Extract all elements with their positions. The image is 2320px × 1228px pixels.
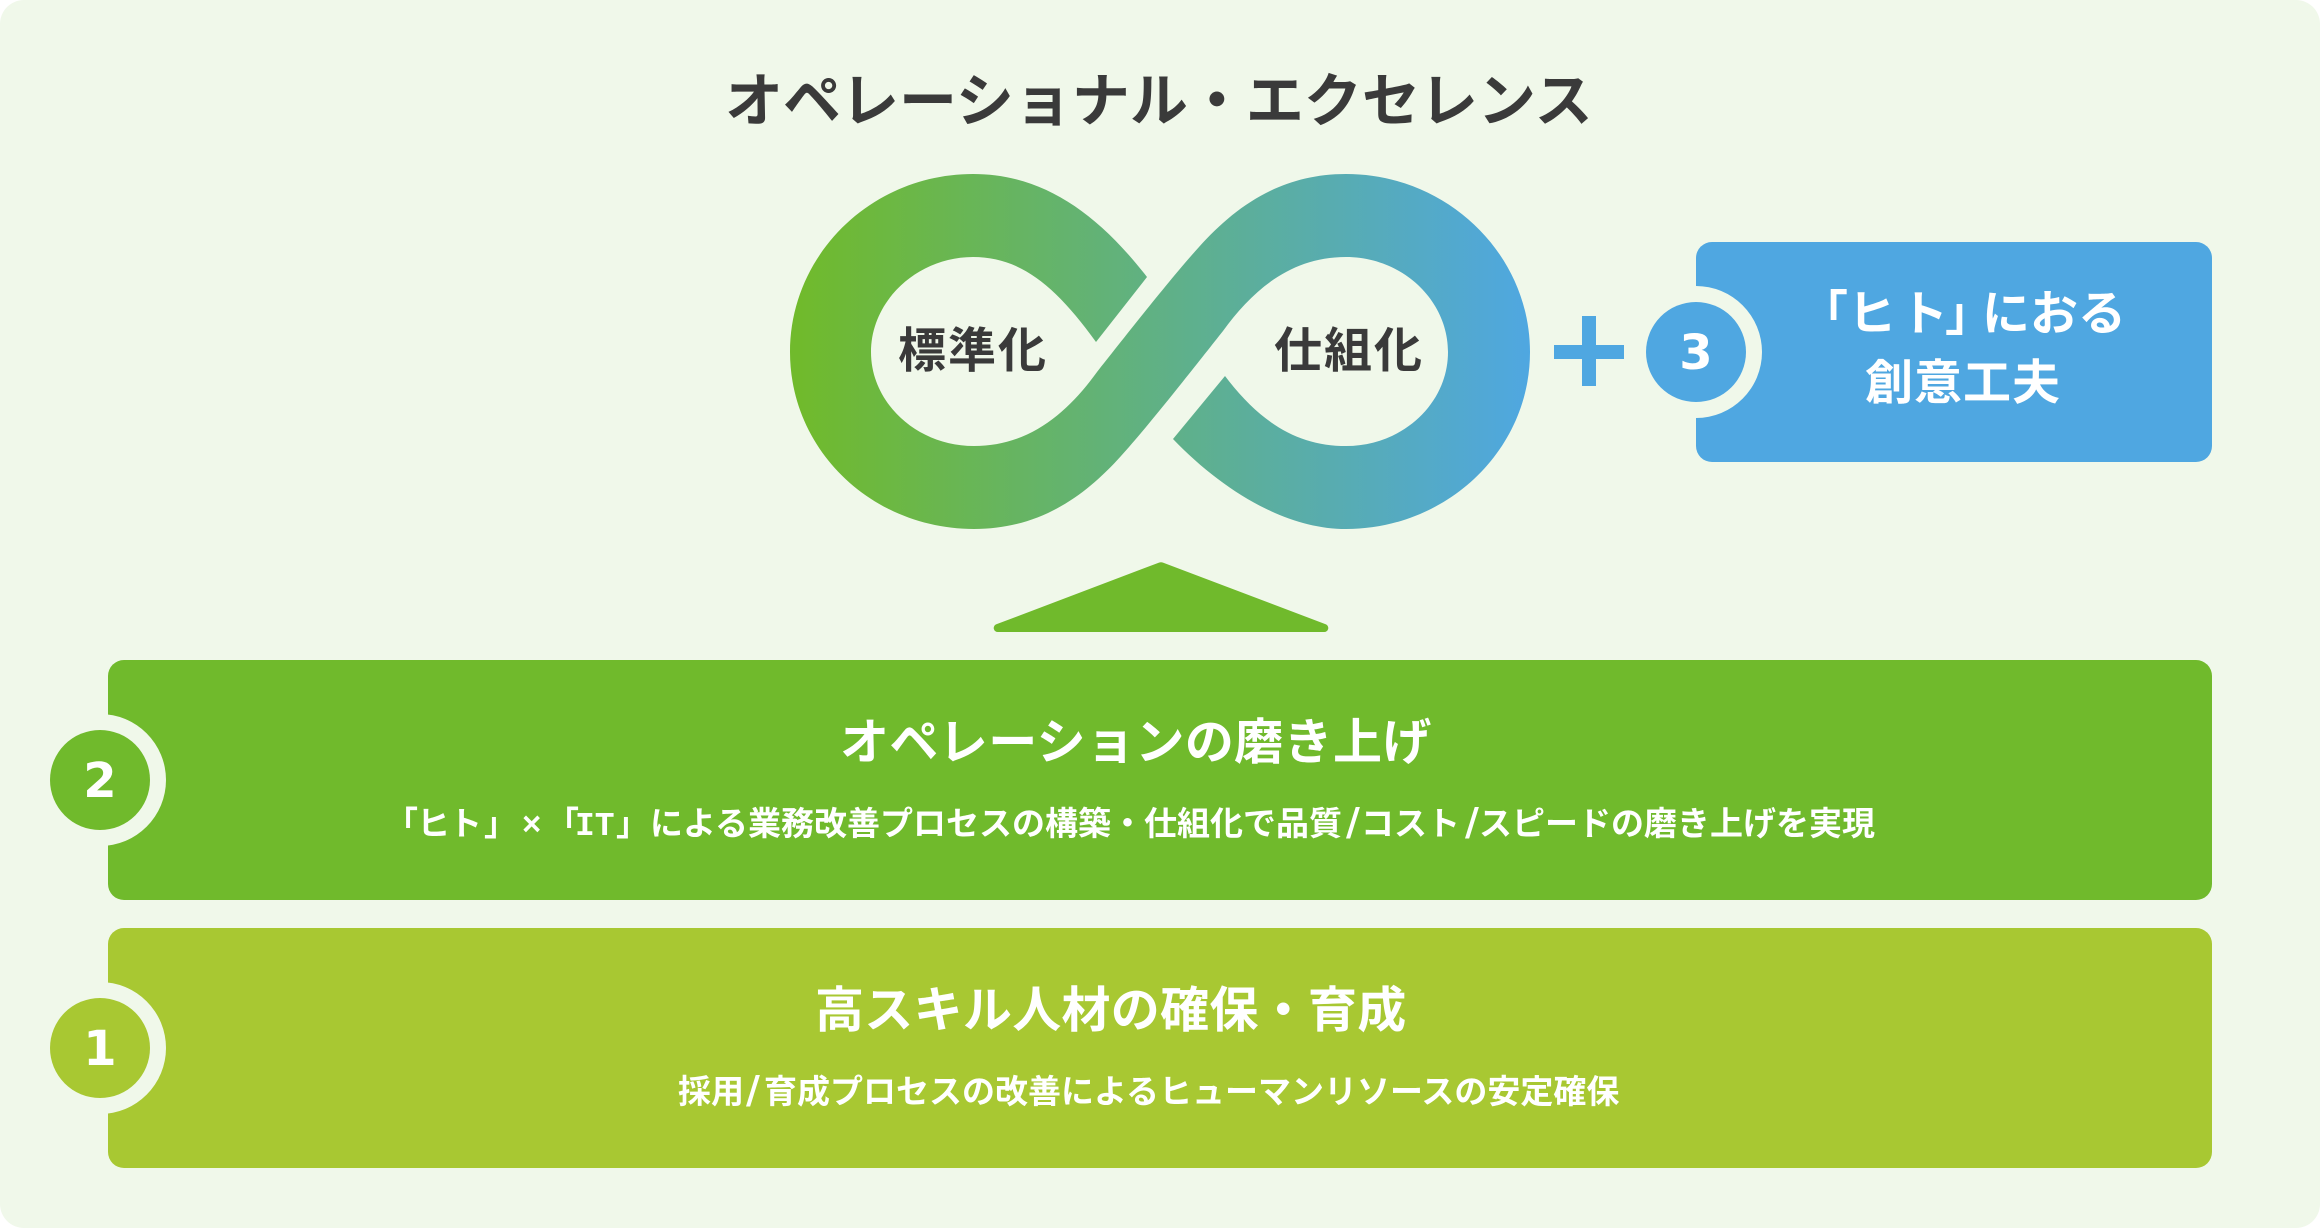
panel 1 description: / (746, 1068, 760, 1112)
panel 2 badge cutout (34, 714, 166, 846)
panel 2 badge (50, 730, 150, 830)
panel 1 badge cutout (34, 982, 166, 1114)
panel 1 description: 育成プロセスの改善によるヒューマンリソースの安定確保 (764, 1073, 1619, 1110)
panel 2 number: 2 (83, 753, 117, 809)
panel 3 text line 1: 」 (1945, 288, 1993, 341)
panel 3 box (1696, 242, 2212, 462)
panel 3: human creativity (1630, 242, 2212, 462)
panel 3 number: 3 (1679, 325, 1713, 381)
label: standardization: 標準化 (898, 325, 1048, 378)
panel 1 badge (50, 998, 150, 1098)
panel 1 box (108, 928, 2212, 1168)
panel 2 heading: オペレーションの磨き上げ (840, 716, 1432, 770)
panel 2 description: 」 (484, 805, 517, 842)
panel 2 description: 「 (546, 805, 579, 842)
panel 2 description: × (522, 805, 541, 842)
infinity loop diagram (790, 174, 1530, 529)
panel 2 description: による業務改善プロセスの構築・仕組化で品質 (650, 805, 1342, 842)
panel 3 badge cutout (1630, 286, 1762, 418)
panel 3 text line 1: 「 (1800, 288, 1848, 341)
panel 1 heading: 高スキル人材の確保・育成 (815, 984, 1407, 1038)
panel 2 description: 「 (385, 805, 418, 842)
panel 2 description: / (1465, 800, 1479, 844)
panel 3 text line 1: ヒ (1848, 288, 1896, 341)
panel 3 text line 1: に (1982, 288, 2030, 341)
panel 2 box (108, 660, 2212, 900)
panel 2 description: コスト (1361, 805, 1460, 842)
panel 2 description: スピードの磨き上げを実現 (1479, 805, 1875, 842)
infinity band (790, 174, 1530, 529)
panel 2 description: IT (575, 808, 615, 845)
panel 2 description: ヒ (417, 805, 450, 842)
title: オペレーショナル・エクセレンス (725, 69, 1593, 134)
panel 1 description: 採用 (678, 1073, 744, 1110)
panel 2 description: / (1346, 800, 1360, 844)
panel 3 text line 1: ト (1900, 288, 1948, 341)
panel 2: operation improvement (34, 660, 2212, 900)
panel 2 description: ト (449, 805, 482, 842)
label: systematization: 仕組化 (1274, 325, 1424, 378)
panel 1 number: 1 (83, 1021, 117, 1077)
plus sign (1554, 316, 1624, 386)
panel 3 badge (1646, 302, 1746, 402)
panel 2 description: 」 (616, 805, 649, 842)
panel 1: high skill talent (34, 928, 2212, 1168)
panel 3 text line 1: る (2078, 288, 2126, 341)
upward arrow triangle (994, 562, 1328, 632)
panel 3 text line 2: 創意工夫 (1865, 357, 2061, 410)
panel 3 text line 1: お (2030, 288, 2078, 341)
